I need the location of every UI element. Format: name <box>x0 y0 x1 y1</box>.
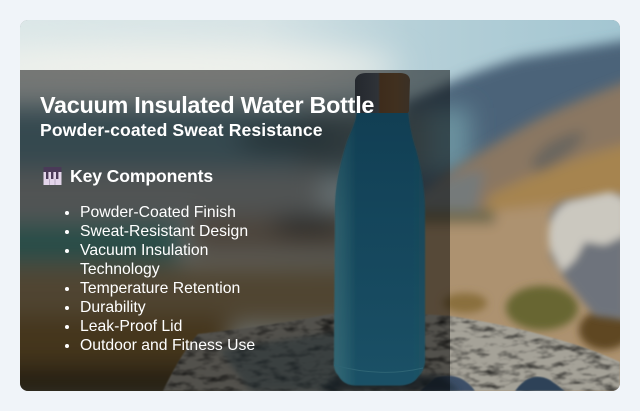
subtitle: Powder-coated Sweat Resistance <box>40 120 323 140</box>
icon: piano keys <box>44 167 62 185</box>
rock ground <box>163 312 620 391</box>
darkening panel <box>20 70 450 391</box>
list: key components <box>65 204 255 354</box>
bottle base seam <box>334 365 423 372</box>
list: key components: Vacuum Insulation <box>80 242 208 259</box>
distant blue hill <box>405 38 640 220</box>
list: key components: Leak-Proof Lid <box>80 318 182 335</box>
bottle body shading <box>334 110 425 386</box>
boulder at right <box>549 192 626 320</box>
list: key components: Powder-Coated Finish <box>80 204 236 221</box>
title: Vacuum Insulated Water Bottle <box>40 92 374 118</box>
panel: text overlay <box>40 92 374 354</box>
grass tuft <box>443 286 631 350</box>
blurred left shoreline and sea <box>0 108 470 405</box>
brown hillside <box>405 75 640 410</box>
list: key components: Outdoor and Fitness Use <box>80 337 255 354</box>
heading: key components: Key Components <box>70 166 213 186</box>
list: key components: Durability <box>80 299 146 316</box>
bottle body <box>334 110 425 386</box>
bottle lid <box>355 73 410 113</box>
list: key components: Temperature Retention <box>80 280 240 297</box>
bottle <box>334 73 425 386</box>
list: key components: Sweat-Resistant Design <box>80 223 248 240</box>
list: key components: Technology <box>80 261 160 278</box>
